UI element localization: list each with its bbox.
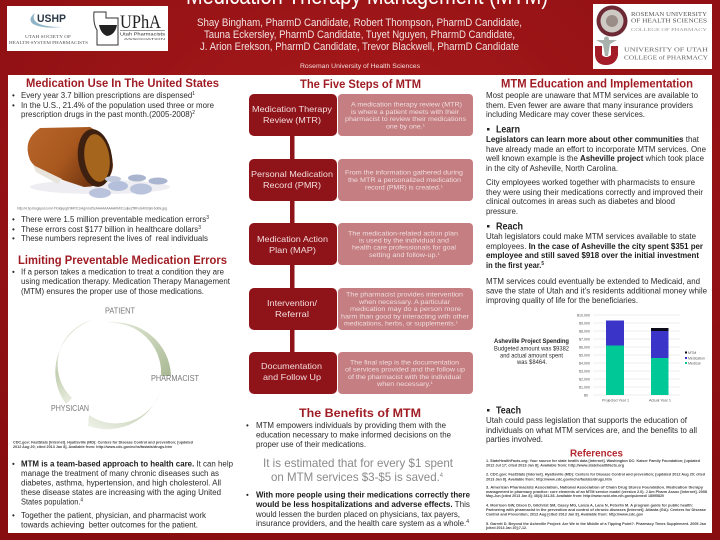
text: fewer hospitalizations: would lessen the burden placed on physicians, tax payers, bbox=[255, 510, 460, 519]
step 3: MAP: Plan (MAP) bbox=[269, 245, 316, 255]
bullet list: prescriptions: • bbox=[12, 101, 15, 110]
bullet list: prescriptions: Every year 3.7 billion prescriptions are dispensed bbox=[21, 91, 195, 100]
x-axis labels: Projected Year 1 bbox=[602, 398, 629, 402]
x-axis labels: Actual Year 1 bbox=[649, 398, 671, 402]
x-axis labels bbox=[602, 398, 671, 402]
heading: five steps: The Five Steps of MTM bbox=[300, 79, 421, 91]
text: team-based care: towards achieving better outcomes for the patient. bbox=[21, 520, 198, 530]
step 4: intervention: Intervention/ bbox=[267, 298, 318, 308]
panel: medication use bbox=[12, 78, 234, 530]
logos: Roseman and University of Utah: COLLEGE of PHARMACY bbox=[624, 54, 709, 62]
step 1: MTR: is where a patient meets with their bbox=[351, 109, 460, 116]
references list: May-Jun [cited 2013 Jan 8]; 48(3):341-53. Available from: http://www.ncbi.nlm.nih.gov/pubmed/ 18595820 bbox=[486, 494, 664, 498]
axis labels: $5,000 bbox=[579, 353, 590, 357]
text: empowerment: • bbox=[246, 421, 249, 430]
step 5: documentation: Documentation bbox=[261, 361, 322, 371]
axis labels: $3,000 bbox=[579, 369, 590, 373]
heading: education: MTM Education and Implementation bbox=[501, 78, 693, 90]
text: team-based care: • bbox=[12, 460, 15, 468]
legend: Medication bbox=[688, 356, 705, 360]
text: teach: Utah could pass legislation that supports the education of bbox=[486, 416, 688, 425]
subheading: teach: Teach bbox=[496, 406, 521, 416]
text: learn: they were using their medications correctly and improved their bbox=[486, 188, 703, 197]
text: team-based care bbox=[12, 460, 234, 530]
callout: savings: on MTM services $3-$5 is saved. bbox=[271, 470, 447, 484]
authors: Tauna Eckersley, PharmD Candidate, Tuyet Nguyen, PharmD Candidate, bbox=[204, 29, 515, 41]
axis labels: $8,000 bbox=[579, 329, 590, 333]
text: learn: pressure. bbox=[486, 207, 518, 216]
references list: Control and Prevention; 2012 Aug [cited 2013 Jan 8]. Available from: http://www.cdc.gov bbox=[486, 512, 643, 516]
text: learn bbox=[485, 135, 707, 216]
bar: projected year 1 bbox=[606, 320, 624, 395]
bullet list: prescriptions: • bbox=[12, 91, 15, 100]
text: fewer hospitalizations: would be less hospitalizations and adverse effects. This bbox=[255, 500, 470, 509]
subheading: teach bbox=[487, 406, 521, 416]
logos: USHP and UPhA: Utah Pharmacists bbox=[120, 32, 166, 38]
text: team-based care: • bbox=[12, 511, 15, 520]
text: empowerment: MTM empowers individuals by providing them with the bbox=[256, 421, 447, 430]
references list: 2012 Jul 17; cited 2013 Jan 8]. Available from: http://www.statehealthfacts.org bbox=[486, 464, 624, 468]
logos: Roseman and University of Utah bbox=[593, 4, 712, 69]
step 4: intervention: when necessary. A particular bbox=[358, 299, 451, 306]
authors: J. Arion Erekson, PharmD Candidate, Trevor Blackwell, PharmD Candidate bbox=[200, 41, 519, 53]
step 1: MTR: 1 bbox=[423, 122, 426, 128]
step 5: documentation: 1 bbox=[431, 380, 434, 385]
panel: education and implementation bbox=[485, 78, 708, 530]
text: reach: in the first year. bbox=[486, 261, 545, 270]
legend: MTM bbox=[688, 351, 696, 355]
text: intro: them. Even fewer are aware that many insurance providers bbox=[486, 101, 693, 110]
text: fewer hospitalizations: 4 bbox=[466, 519, 469, 525]
axis labels: $2,000 bbox=[579, 377, 590, 381]
bullet list: errors: • bbox=[12, 225, 15, 234]
text: fewer hospitalizations: insurance providers, and the health care system as a whole. bbox=[256, 519, 469, 528]
panel: benefits bbox=[246, 408, 471, 528]
text: learn: City employees worked together with pharmacists to ensure bbox=[486, 178, 696, 187]
text: team-based care: manage the treatment of many chronic diseases such as bbox=[21, 469, 219, 478]
image credit: http://4.bp.blogspot.com/-TKdqkpqjY9M/Tc1rAgmmJ5xAAAAAAAAAKM/CzujkeZfRFo/s400/pill-bottle.jpg bbox=[17, 206, 167, 210]
step 3: MAP: is used by the individual and bbox=[359, 238, 449, 244]
stacked bar chart bbox=[577, 313, 705, 402]
references list: 5. Garrett D. Beyond the Asheville Project: Are We in the Middle of a Tipping Point?. Pharmacy Times Supplement. 2005 Jan bbox=[486, 522, 706, 526]
logos: USHP and UPhA: ASSOCIATION bbox=[124, 37, 165, 41]
heading: medication use: Medication Use In The United States bbox=[26, 78, 219, 90]
axis labels: $6,000 bbox=[579, 345, 590, 349]
step 4: intervention: The pharmacist provides intervention bbox=[346, 292, 463, 298]
subheading: reach: Reach bbox=[496, 222, 523, 232]
text: fewer hospitalizations: With more people using their medications correctly there bbox=[256, 490, 471, 500]
axis labels: $7,000 bbox=[579, 337, 590, 341]
bullet list: prescriptions bbox=[12, 91, 215, 119]
logos: Roseman and University of Utah: ROSEMAN UNIVERSITY bbox=[631, 12, 708, 18]
bullet list: errors: • bbox=[12, 215, 15, 224]
label: pharmacist: PHARMACIST bbox=[151, 374, 199, 383]
text: learn: have already made an effort to incorporate MTM services. One bbox=[486, 145, 707, 154]
legend: Medical bbox=[688, 361, 701, 365]
connector line bbox=[290, 130, 294, 358]
callout: Asheville spending: was $8464. bbox=[516, 359, 547, 366]
text: empowerment bbox=[246, 421, 452, 449]
step 1: MTR: pharmacist to review their medications bbox=[345, 116, 467, 123]
text: teach: parties involved. bbox=[486, 435, 543, 444]
axis labels: $0 bbox=[584, 393, 588, 397]
step 2: PMR bbox=[249, 159, 473, 201]
callout: savings: 4 bbox=[440, 473, 444, 479]
step 1: MTR: A medication therapy review (MTR) bbox=[351, 102, 462, 108]
references list: Partnering with pharmacist in the prevention and control of chronic diseases [Internet]. Atlanta (GA): Centers for Disease bbox=[486, 508, 706, 512]
source note: 2012 Aug 20; cited 2013 Jan 8]. Available from: http://www.cdc.gov/nchs/fastats/drugs.htm bbox=[13, 445, 172, 449]
step 1: MTR: Review (MTR) bbox=[263, 115, 321, 125]
text: learn: in the city of Asheville, North Carolina. bbox=[486, 164, 618, 173]
step 2: PMR: record (PMR) is created. bbox=[365, 184, 437, 192]
bullet list: prescriptions: prescription drugs in the past month.(2005-2008) bbox=[21, 110, 194, 119]
text: teach: individuals on what MTM services are, and the benefits to all bbox=[486, 426, 697, 435]
text: medication therapy definition: • bbox=[12, 268, 15, 276]
logos: USHP and UPhA: HEALTH-SYSTEM PHARMACISTS bbox=[9, 41, 88, 45]
axis labels: $1,000 bbox=[579, 385, 590, 389]
text: team-based care: 4 bbox=[80, 498, 83, 504]
text: reach: Utah legislators could make MTM services available to state bbox=[486, 232, 697, 241]
label: physician: PHYSICIAN bbox=[51, 404, 89, 413]
text: medication therapy definition bbox=[12, 268, 231, 296]
text: reach: 5 bbox=[541, 261, 544, 267]
step 2: PMR: 1 bbox=[441, 184, 444, 188]
callout: savings: It is estimated that for every $1 spent bbox=[263, 456, 454, 470]
callout: Asheville spending bbox=[494, 338, 569, 366]
subheading: learn: Learn bbox=[496, 124, 520, 136]
panel: five steps bbox=[249, 79, 473, 394]
logos: USHP and UPhA: UPhA bbox=[120, 12, 161, 33]
image: spilled pill bottle bbox=[28, 127, 170, 198]
step 5: documentation: of services provided and the follow up bbox=[345, 366, 465, 374]
axis labels bbox=[577, 313, 590, 397]
step 2: PMR: Personal Medication bbox=[251, 169, 333, 179]
logos: Roseman and University of Utah: UNIVERSITY OF UTAH bbox=[624, 48, 709, 54]
diagram: care cycle bbox=[51, 306, 199, 429]
text: learn: well known example is the Asheville project which took place bbox=[485, 154, 705, 163]
text: medication therapy definition: using medication therapy. Medication Therapy Management bbox=[21, 277, 231, 286]
step 3: MAP: health care professionals for goal bbox=[352, 244, 457, 252]
references list: 1. StateHealthFacts.org: Your source for state health data [Internet]. Washington DC: Kaiser Family Foundation; [updated bbox=[486, 459, 700, 463]
header bbox=[7, 0, 712, 70]
step 1: MTR: one by one. bbox=[386, 124, 420, 130]
bullet list: errors: There were 1.5 million preventable medication errors bbox=[21, 215, 208, 224]
text: learn: Legislators can learn more about other communities that bbox=[486, 135, 700, 144]
step 2: PMR: From the information gathered during bbox=[345, 170, 463, 176]
bullet list: errors: • bbox=[12, 234, 15, 243]
axis labels: $4,000 bbox=[579, 361, 590, 365]
callout: savings bbox=[263, 456, 454, 484]
legend bbox=[685, 351, 705, 365]
step 3: MAP: The medication-related action plan bbox=[348, 230, 458, 238]
bullet list: errors: 3 bbox=[198, 225, 201, 231]
text: medication therapy definition: (MTM) ensures the proper use of those medications. bbox=[21, 287, 204, 296]
bullet list: prescriptions: 2 bbox=[192, 110, 195, 116]
authors bbox=[197, 17, 522, 53]
text: learn: clinical outcomes in areas such as diabetes and blood bbox=[486, 197, 675, 206]
references list: management in pharmacy practice: core elements of an MTM service model (version 2.0). J Am Pharm Assoc [Internet]. 2008 bbox=[486, 490, 707, 494]
text: reach: save the state of Utah and it's residents additional money while bbox=[486, 286, 708, 296]
text: reach: MTM services could eventually be extended to Medicaid, and bbox=[486, 277, 700, 286]
heading: limiting errors: Limiting Preventable Medication Errors bbox=[18, 255, 227, 267]
step 5: documentation: and Follow Up bbox=[263, 372, 321, 382]
heading: references: References bbox=[570, 448, 623, 460]
text: reach: employee and still saved $918 over the initial investment bbox=[486, 251, 699, 260]
callout: Asheville spending: and actual amount spent bbox=[500, 352, 563, 359]
step 4: intervention: medication may do a person more bbox=[350, 306, 461, 313]
text: reach bbox=[486, 232, 708, 305]
text: intro bbox=[486, 91, 699, 119]
logos: USHP and UPhA: USHP bbox=[37, 13, 66, 25]
text: fewer hospitalizations bbox=[246, 490, 471, 528]
label: patient: PATIENT bbox=[105, 306, 135, 316]
step 4: intervention: Referral bbox=[275, 309, 309, 319]
source note: CDC.gov: FastStats [Internet]. Hyattsville (MD): Centers for Disease Control and prevention; [updated bbox=[13, 440, 193, 444]
step 2: PMR: the MTR a personalized medication bbox=[348, 177, 461, 184]
text: team-based care: States population. bbox=[21, 498, 85, 506]
bullet list: prescriptions: 1 bbox=[192, 91, 195, 97]
logos: Roseman and University of Utah: COLLEGE OF PHARMACY bbox=[631, 27, 708, 32]
references list: 2013 Jan 8]. Available from: http://www.cdc.gov/nchs/fastats/drugs.htm bbox=[486, 478, 612, 482]
references list: 3. American Pharmacists Association, National Association of Chain Drug Stores Foundation. Medication therapy bbox=[486, 486, 703, 490]
step 2: PMR: Record (PMR) bbox=[263, 180, 321, 190]
callout: Asheville spending: Budgeted amount was $9382 bbox=[494, 345, 569, 352]
references list: [cited 2013 Jan 20];7-12. bbox=[486, 526, 527, 530]
axis labels: $9,000 bbox=[579, 321, 590, 325]
step 4: intervention: medications, herbs, or supplements. bbox=[344, 320, 450, 328]
authors: Shay Bingham, PharmD Candidate, Robert Thompson, PharmD Candidate, bbox=[197, 17, 522, 29]
text: team-based care: Together the patient, physician, and pharmacist work bbox=[21, 511, 207, 520]
step 3: MAP: Medication Action bbox=[257, 234, 328, 244]
text: empowerment: proper use of their medications. bbox=[256, 440, 366, 449]
source note bbox=[13, 440, 193, 449]
axis labels: $10,000 bbox=[577, 313, 590, 317]
step 1: MTR: Medication Therapy bbox=[252, 104, 333, 114]
text: intro: including Medicare may cover these services. bbox=[486, 110, 645, 119]
step 5: documentation: The final step is the documentation bbox=[350, 360, 459, 366]
bullet list: errors: These numbers represent the lives of real individuals bbox=[21, 234, 208, 243]
logos: USHP and UPhA bbox=[7, 6, 168, 51]
heading: benefits: The Benefits of MTM bbox=[299, 408, 421, 420]
text: reach: employees. In the case of Asheville the city spent $351 per bbox=[486, 242, 703, 251]
logos: USHP and UPhA: UTAH SOCIETY OF bbox=[25, 35, 71, 39]
bullet list: errors: These errors cost $177 billion in healthcare dollars bbox=[21, 225, 200, 234]
text: teach bbox=[486, 416, 697, 444]
bullet list: prescriptions: In the U.S., 21.4% of the population used three or more bbox=[21, 101, 215, 110]
text: empowerment: education necessary to make informed decisions on the bbox=[256, 430, 452, 440]
references list bbox=[486, 459, 707, 530]
references list: 2. CDC.gov: FastStats [Internet]. Hyattsville (MD): Centers for Disease Control and prevention; [updated 2012 Aug 20; cited bbox=[486, 472, 705, 476]
text: team-based care: MTM is a team-based approach to health care. It can help bbox=[21, 460, 234, 468]
subheading: learn bbox=[487, 124, 520, 136]
step 5: documentation: when necessary. bbox=[377, 381, 426, 388]
step 3: MAP: 1 bbox=[438, 251, 441, 256]
bar: actual year 1 bbox=[651, 328, 668, 395]
step 3: MAP bbox=[249, 223, 473, 265]
step 4: intervention bbox=[249, 288, 473, 330]
bullet list: errors: 3 bbox=[206, 215, 209, 221]
text: medication therapy definition: If a person takes a medication to treat a condition they are bbox=[21, 268, 225, 276]
subheading: reach bbox=[487, 222, 523, 232]
text: team-based care: these disease states are increasing with the aging United bbox=[21, 488, 221, 497]
text: reach: improving quality of life for the beneficiaries. bbox=[486, 296, 638, 305]
bullet list: errors bbox=[12, 215, 209, 243]
callout: Asheville spending: Asheville Project Spending bbox=[494, 338, 569, 345]
text: team-based care: diabetes, asthma, hypertension, and high cholesterol. All bbox=[21, 478, 221, 488]
step 1: MTR bbox=[249, 94, 473, 136]
step 3: MAP: setting and follow-up. bbox=[369, 252, 431, 259]
text: fewer hospitalizations: • bbox=[246, 490, 249, 500]
step 5: documentation bbox=[249, 352, 473, 394]
text: intro: Most people are unaware that MTM services are available to bbox=[486, 91, 699, 100]
step 4: intervention: 1 bbox=[456, 320, 459, 324]
references list: 4. Morrison GW, Dixon D, Gilchrist SM, Casey MG, Lanza A, Lane N, Peterlin M. A program guide for public health: bbox=[486, 504, 693, 508]
step 5: documentation: of the pharmacist with the individual bbox=[348, 374, 462, 381]
logos: Roseman and University of Utah: OF HEALTH SCIENCES bbox=[631, 18, 707, 24]
affiliation: Roseman University of Health Sciences bbox=[300, 63, 421, 70]
step 4: intervention: harm than good by interacting with other bbox=[341, 314, 470, 320]
